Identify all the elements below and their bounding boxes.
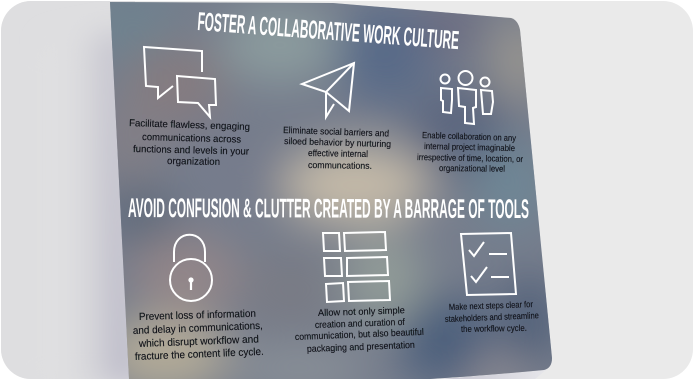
text: facilitate communications: organization — [167, 156, 220, 168]
text: prevent loss of information: which disrupt workflow and — [138, 334, 259, 350]
text: enable collaboration: Enable collaboration on any — [422, 130, 517, 143]
text: make next steps clear: stakeholders and streamline — [445, 310, 539, 324]
icon: three people — [440, 71, 493, 124]
icon: padlock — [170, 235, 212, 301]
text: enable collaboration — [417, 130, 523, 174]
text: make next steps clear: the workflow cycle. — [461, 323, 527, 334]
panel: blurred photo background — [80, 0, 560, 380]
text: prevent loss of information — [133, 309, 264, 363]
text: allow not only simple: communication, but also beautiful — [295, 326, 424, 342]
text: eliminate social barriers — [283, 125, 391, 171]
text: eliminate social barriers: siloed behavior by nurturing — [284, 136, 391, 149]
text: enable collaboration: internal project imaginable — [424, 141, 515, 153]
text: eliminate social barriers: Eliminate social barriers and — [283, 125, 389, 139]
text: facilitate communications — [129, 118, 250, 168]
icon: content grid — [323, 232, 390, 302]
text: prevent loss of information: and delay in communications, — [133, 321, 263, 337]
text: make next steps clear — [445, 299, 539, 334]
text: prevent loss of information: Prevent loss of information — [139, 309, 256, 323]
text: facilitate communications: communications across — [142, 132, 241, 146]
icon: checklist — [461, 233, 516, 295]
icon: speech bubbles — [144, 47, 216, 117]
text: allow not only simple — [295, 304, 424, 354]
text: make next steps clear: Make next steps clear for — [449, 299, 533, 312]
icon: paper plane — [302, 63, 354, 117]
text: enable collaboration: irrespective of time, location, or — [417, 152, 523, 164]
text: allow not only simple: packaging and presentation — [307, 339, 415, 354]
text: eliminate social barriers: effective internal — [308, 148, 368, 159]
text: allow not only simple: creation and curation of — [315, 316, 405, 330]
text: prevent loss of information: fracture the content life cycle. — [135, 347, 264, 363]
text: eliminate social barriers: communcations. — [308, 160, 372, 171]
text: enable collaboration: organizational level — [439, 163, 505, 174]
text: allow not only simple: Allow not only simple — [318, 304, 405, 318]
text: facilitate communications: Facilitate flawless, engaging — [129, 118, 250, 133]
text: facilitate communications: functions and levels in your — [133, 144, 250, 158]
